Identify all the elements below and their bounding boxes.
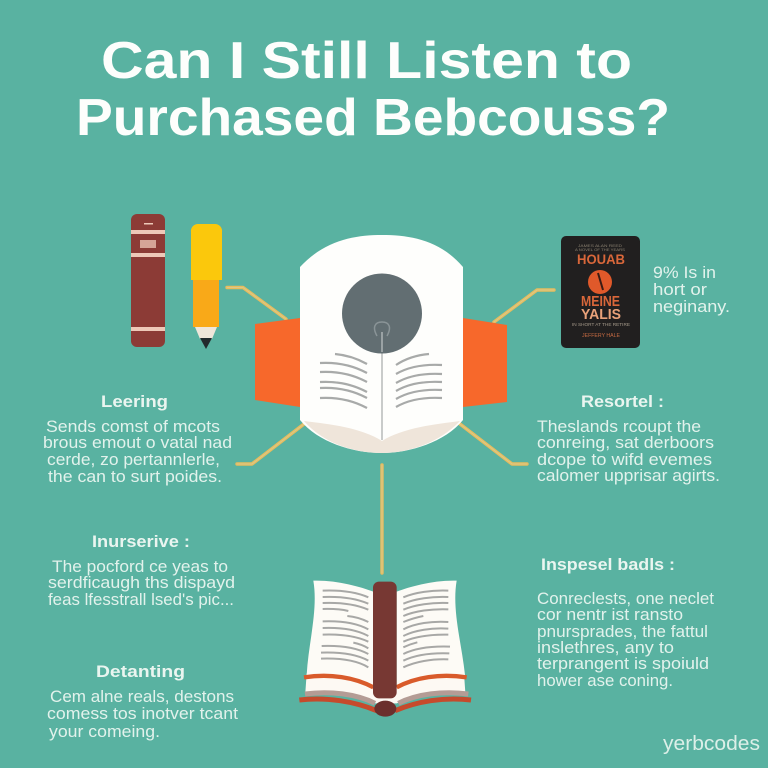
title: Can I Still Listen to: [101, 32, 632, 90]
callout: percentage note: neginany.: [653, 297, 730, 316]
text block: Inspesel badls: hower ase coning.: [537, 671, 673, 690]
icon: grey circle with earphone: [342, 274, 422, 354]
callout: percentage note: 9% Is in: [653, 263, 716, 282]
text block: Inspesel badls: Inspesel badls :: [541, 556, 675, 574]
black book cover: HOUAB: [577, 251, 625, 267]
text block: Leering: brous emout o vatal nad: [43, 433, 232, 452]
text block: Inurserive: feas lfesstrall lsed's pic...: [48, 590, 234, 609]
text block: Detanting: Detanting: [96, 663, 185, 681]
text block: Inspesel badls: Conreclests, one neclet: [537, 589, 714, 608]
white lower page stack: [305, 673, 465, 703]
callout: percentage note: hort or: [653, 280, 707, 299]
black book cover: A NOVEL OF THE YEARS: [575, 247, 625, 252]
book spine: [373, 582, 397, 698]
text block: Inspesel badls: cor nentr ist ransto: [537, 605, 683, 624]
central open book illustration: [255, 235, 507, 453]
icon: pencil: [191, 224, 222, 349]
text block: Leering: [43, 393, 232, 486]
text block: Resortel: conreing, sat derboors: [537, 433, 714, 452]
text block: Leering: cerde, zo pertannlerle,: [47, 450, 220, 469]
text block: Inspesel badls: [537, 556, 714, 690]
left page text lines: [320, 354, 367, 408]
text block: Resortel: Theslands rcoupt the: [537, 417, 701, 436]
connector arrows: [227, 288, 554, 573]
right page text: [403, 591, 450, 667]
black book cover: JAMES ALAN REED: [578, 243, 622, 248]
text block: Resortel: dcope to wifd evemes: [537, 450, 712, 469]
black book cover: YALIS: [581, 306, 621, 323]
black book cover: MEINE: [581, 293, 620, 310]
text block: Detanting: Cem alne reals, destons: [50, 687, 234, 706]
brand wordmark: yerbcodes: [663, 733, 760, 755]
icon: maroon book: [131, 214, 165, 347]
text block: Detanting: [47, 663, 238, 741]
text block: Inurserive: The pocford ce yeas to: [52, 557, 228, 576]
page edge bands: [299, 676, 471, 711]
text block: Inspesel badls: inslethres, any to: [537, 638, 674, 657]
black book cover: IN SHORT AT THE RETIRE: [572, 322, 630, 327]
black book cover: JEFFERY HALE: [582, 333, 621, 339]
text block: Leering: the can to surt poides.: [48, 467, 222, 486]
text block: Resortel: [537, 393, 720, 485]
text block: Detanting: your comeing.: [49, 722, 160, 741]
title: [76, 32, 670, 147]
callout: percentage note: [653, 263, 730, 316]
text block: Resortel: calomer upprisar agirts.: [537, 466, 720, 485]
left page text: [321, 591, 368, 667]
text block: Inurserive: [48, 533, 235, 609]
text block: Inurserive: Inurserive :: [92, 533, 190, 551]
text block: Inspesel badls: pnursprades, the fattul: [537, 622, 708, 641]
black book cover: [561, 236, 640, 348]
text block: Inspesel badls: terprangent is spoiuld: [537, 654, 709, 673]
text block: Detanting: comess tos inotver tcant: [47, 704, 238, 723]
text block: Leering: Sends comst of mcots: [46, 417, 220, 436]
text block: Inurserive: serdficaugh ths dispayd: [48, 573, 235, 592]
title: Purchased Bebcouss?: [76, 89, 670, 147]
right page text lines: [396, 354, 442, 407]
text block: Resortel: Resortel :: [581, 393, 664, 411]
lower open book illustration: [299, 581, 471, 717]
text block: Leering: Leering: [101, 393, 168, 411]
